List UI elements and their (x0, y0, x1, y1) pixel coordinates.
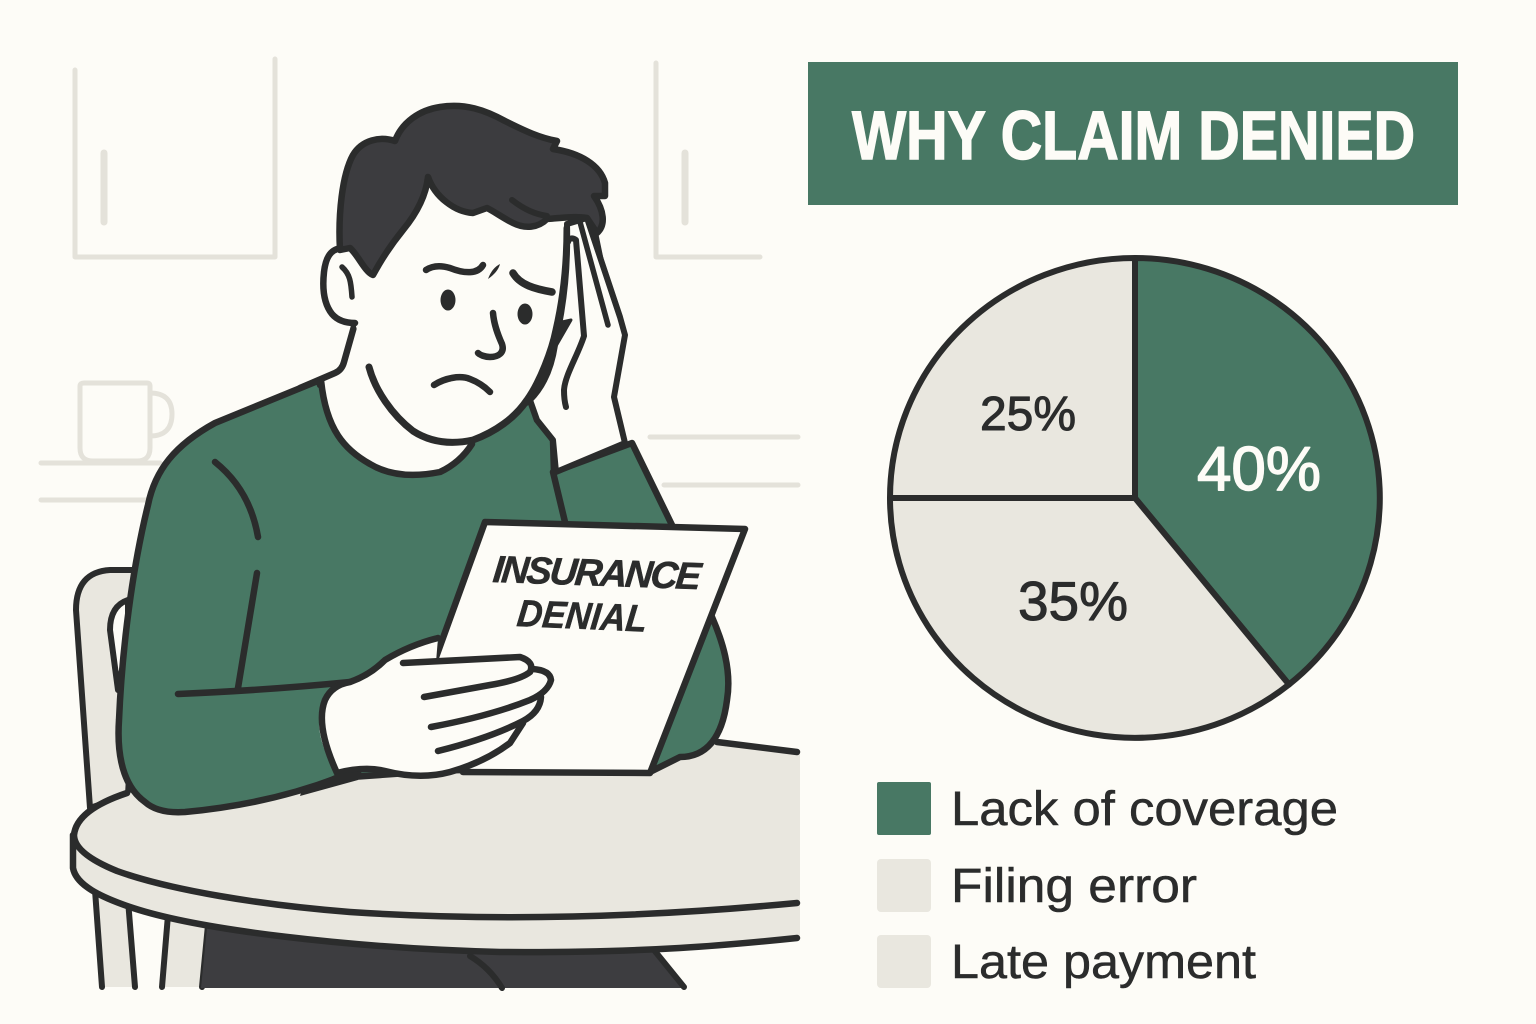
eyes (440, 290, 456, 310)
title text: WHY CLAIM DENIED (852, 97, 1415, 174)
legend label: lack of coverage: Lack of coverage (951, 783, 1338, 836)
hand on head (530, 218, 625, 472)
label 40%: 40% (1197, 435, 1321, 504)
title banner (808, 62, 1458, 205)
slice: lack of coverage 40% (1135, 258, 1380, 684)
slice: filing error 25% (890, 258, 1135, 498)
label 35%: 35% (1018, 570, 1128, 632)
man's neck and face (300, 222, 569, 475)
letter heading: INSURANCE (491, 549, 705, 598)
letter subheading: DENIAL (515, 593, 650, 641)
legend swatch: lack of coverage (877, 782, 931, 835)
eyebrows (426, 265, 483, 272)
legend swatch: late payment (877, 935, 931, 988)
mouth (434, 377, 490, 392)
slice: late payment 35% (890, 498, 1289, 738)
pie chart (890, 258, 1380, 738)
hand holding letter (300, 638, 551, 796)
nose (478, 313, 503, 357)
man's sweater (119, 378, 728, 812)
sweater fold lines (178, 462, 565, 694)
legend label: late payment: Late payment (951, 936, 1256, 989)
legend swatch: filing error (877, 859, 931, 912)
legend label: filing error: Filing error (951, 860, 1197, 913)
kitchen background (41, 59, 798, 500)
insurance denial letter (435, 522, 745, 773)
jaw line (369, 228, 567, 442)
label 25%: 25% (980, 388, 1076, 441)
man's legs (201, 928, 686, 988)
ear (323, 248, 355, 323)
chair (76, 570, 208, 987)
legend (877, 782, 1338, 989)
man's hair (340, 106, 605, 275)
table (73, 742, 800, 952)
